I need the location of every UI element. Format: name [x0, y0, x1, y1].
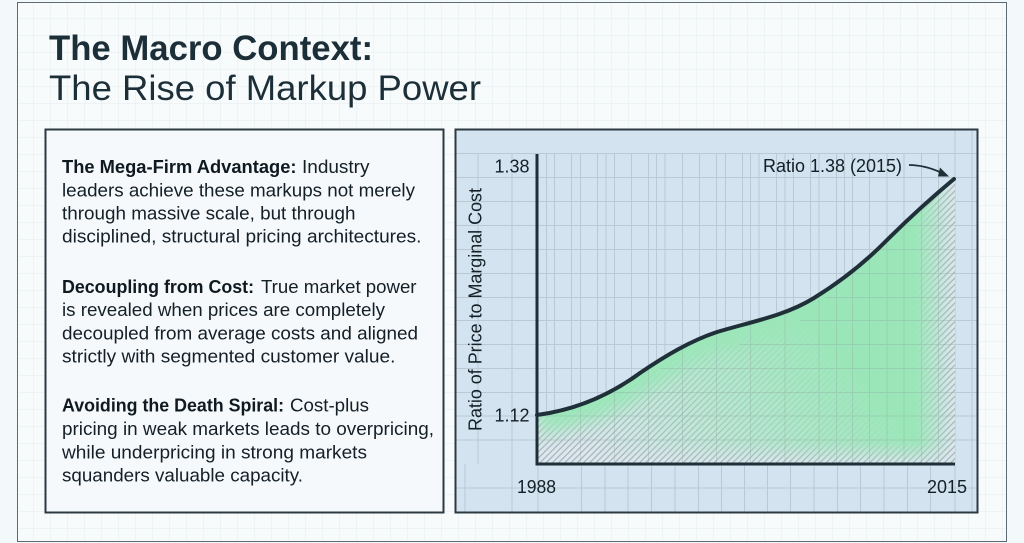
- panel border: [456, 130, 978, 512]
- text block: decoupling from cost: decoupled from average costs and aligned: [62, 324, 418, 344]
- grid lines: [456, 130, 977, 512]
- y axis: [536, 154, 538, 466]
- x axis: [536, 462, 955, 466]
- text block: decoupling from cost: strictly with segmented customer value.: [62, 346, 396, 366]
- title: The Rise of Markup Power: [49, 68, 481, 108]
- green area fill: [537, 178, 955, 464]
- title: [49, 28, 481, 108]
- panel: text takeaways: [46, 130, 444, 512]
- panel: markup line chart: [456, 130, 978, 512]
- text block: the mega-firm advantage: The Mega-Firm Advantage:: [62, 157, 296, 177]
- x label: 2015: 2015: [927, 476, 967, 497]
- y label: 1.12: 1.12: [494, 404, 530, 426]
- text block: the mega-firm advantage: Industry: [302, 157, 370, 177]
- text block: decoupling from cost: [62, 277, 418, 366]
- arrow: callout to line end: [909, 165, 949, 176]
- text block: the mega-firm advantage: disciplined, structural pricing architectures.: [62, 226, 422, 246]
- text block: the mega-firm advantage: leaders achieve these markups not merely: [62, 180, 416, 200]
- y axis title: Ratio of Price to Marginal Cost: [464, 188, 486, 431]
- x label: 1988: 1988: [517, 476, 556, 497]
- text block: the mega-firm advantage: through massive scale, but through: [62, 204, 356, 224]
- y label: 1.38: 1.38: [494, 156, 530, 176]
- title: The Macro Context:: [49, 28, 373, 68]
- trend line: [537, 179, 954, 415]
- text block: decoupling from cost: is revealed when prices are completely: [62, 300, 386, 320]
- text block: the mega-firm advantage: [62, 157, 422, 246]
- text block: avoiding the death spiral: while underpricing in strong markets: [61, 442, 367, 462]
- grid lines over area: [537, 192, 955, 464]
- callout: ratio 1.38 (2015): Ratio 1.38 (2015): [763, 155, 902, 176]
- text block: decoupling from cost: True market power: [261, 277, 416, 297]
- text block: avoiding the death spiral: squanders valuable capacity.: [62, 466, 303, 486]
- text block: decoupling from cost: Decoupling from Cost:: [62, 277, 254, 297]
- text block: avoiding the death spiral: [61, 396, 434, 486]
- text block: avoiding the death spiral: Cost-plus: [290, 396, 369, 416]
- hatched base under the curve: [537, 178, 955, 464]
- text block: avoiding the death spiral: pricing in weak markets leads to overpricing,: [62, 419, 434, 439]
- text block: avoiding the death spiral: Avoiding the Death Spiral:: [62, 396, 284, 416]
